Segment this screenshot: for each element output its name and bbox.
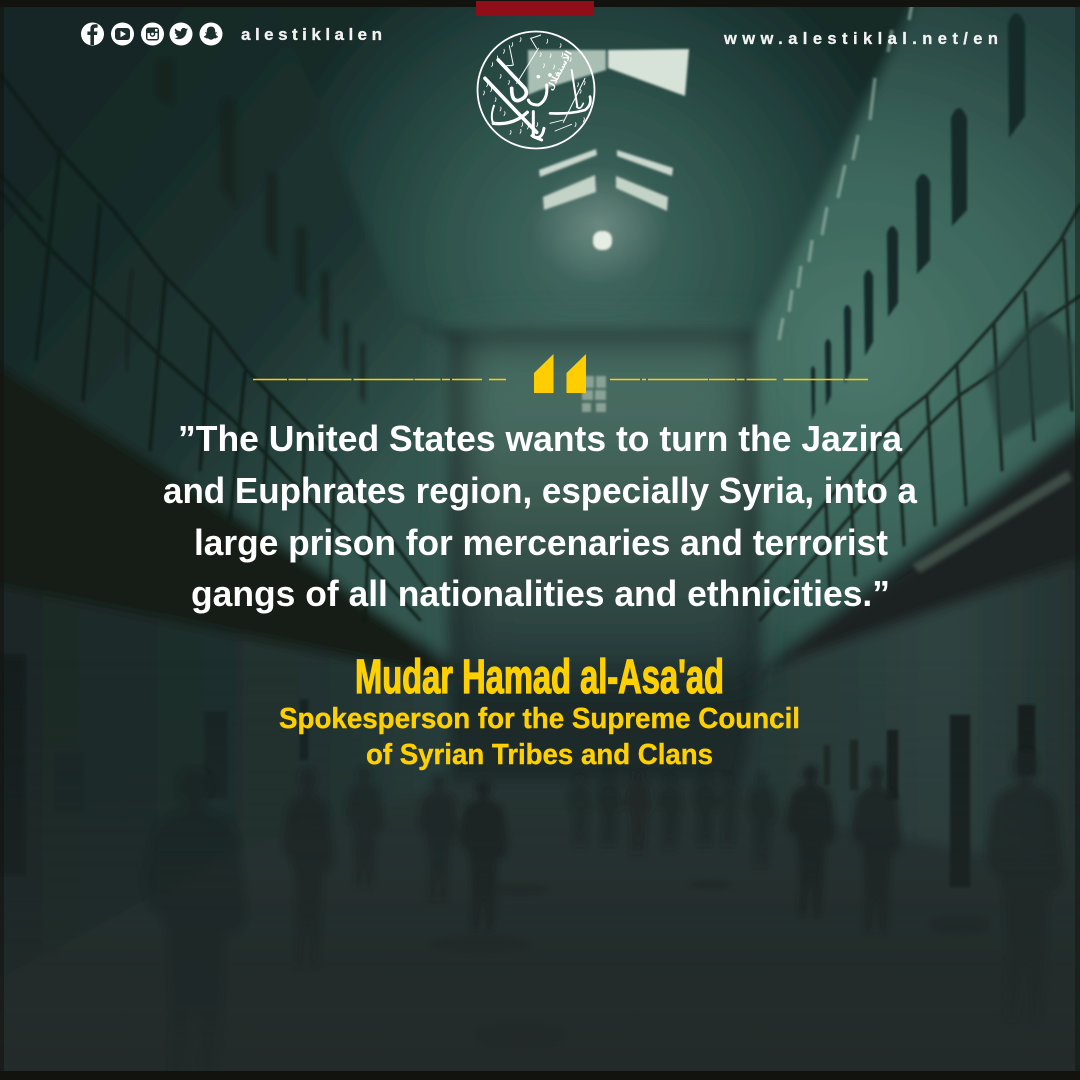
- red top bar: [476, 1, 594, 16]
- right upper wall: [755, 0, 1080, 670]
- floor debris: [430, 880, 990, 1046]
- soldiers walking: [144, 750, 1064, 1080]
- left walkway underside: [0, 340, 450, 690]
- speaker name: Mudar Hamad al-Asa'ad: [355, 651, 724, 704]
- lower haze: [0, 660, 1080, 1080]
- lower wall doors: [0, 655, 1035, 887]
- right railing: [750, 205, 1080, 620]
- website url: www.alestiklal.net/en: [723, 30, 998, 48]
- right walkway ledge: [912, 470, 1072, 573]
- left lower wall: [0, 578, 450, 1010]
- quote text: large prison for mercenaries and terrorist: [194, 522, 888, 563]
- right walkway underside: [745, 395, 1080, 690]
- social handle: alestiklalen: [241, 25, 382, 44]
- logo: circular calligraphy seal: [478, 32, 594, 148]
- icon: twitter: [170, 22, 192, 46]
- icon: snapchat: [200, 22, 222, 46]
- skylights: [528, 49, 689, 250]
- left wall windows: [157, 60, 365, 405]
- laundry on right railing: [985, 310, 1075, 440]
- right wall windows: [811, 13, 1025, 420]
- speaker title: Spokesperson for the Supreme Council: [279, 703, 800, 735]
- speaker title: of Syrian Tribes and Clans: [366, 739, 713, 771]
- icon: opening quotation mark: [534, 354, 586, 393]
- far wall of corridor: [460, 335, 750, 670]
- lamp glow: [530, 165, 670, 285]
- social icons row: [81, 22, 222, 46]
- left railing: [0, 74, 433, 620]
- speaker title: [279, 703, 800, 771]
- left divider line: [253, 378, 506, 380]
- icon: instagram: [141, 22, 164, 46]
- icon: facebook: [81, 22, 104, 46]
- quote text: [163, 418, 918, 614]
- right edge skylights: [779, 4, 912, 340]
- far window grid: [582, 376, 606, 412]
- left upper wall: [0, 0, 450, 660]
- quote text: gangs of all nationalities and ethnicities.”: [191, 573, 890, 614]
- floor: [0, 780, 1080, 1080]
- icon: youtube: [111, 22, 134, 46]
- right lower wall: [740, 546, 1080, 890]
- logo: circular calligraphy seal: الاستقلال: [546, 50, 575, 93]
- ceiling: [260, 0, 935, 370]
- quote divider and marks: [253, 354, 868, 393]
- quote text: and Euphrates region, especially Syria, into a: [163, 470, 918, 511]
- right divider line: [610, 378, 868, 380]
- quote text: ”The United States wants to turn the Jazira: [178, 418, 903, 459]
